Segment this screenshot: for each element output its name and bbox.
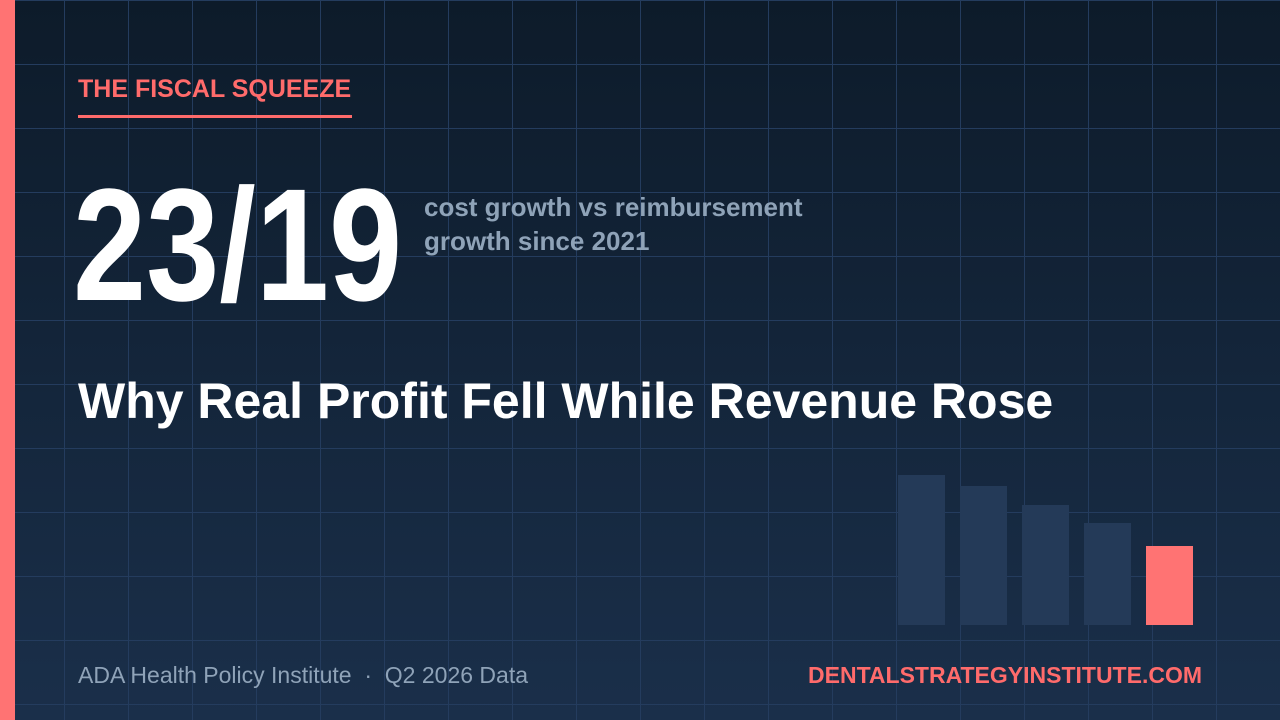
- stat description: cost growth vs reimbursement: [424, 192, 803, 222]
- bar 4: [1084, 523, 1131, 625]
- eyebrow heading: THE FISCAL SQUEEZE: [78, 75, 351, 103]
- source footer: ADA Health Policy Institute · Q2 2026 Data: [78, 662, 528, 688]
- headline: Why Real Profit Fell While Revenue Rose: [78, 373, 1053, 429]
- eyebrow underline: [78, 115, 352, 118]
- bar 1: [898, 475, 945, 625]
- bar 5 highlighted: [1146, 546, 1193, 625]
- accent bar: [0, 0, 15, 720]
- bar 3: [1022, 505, 1069, 625]
- stat description: [424, 192, 803, 256]
- bar chart: [898, 475, 1193, 625]
- big stat: 23/19: [73, 155, 402, 334]
- stat description: growth since 2021: [424, 226, 649, 256]
- bar 2: [960, 486, 1007, 625]
- website footer: DENTALSTRATEGYINSTITUTE.COM: [808, 662, 1202, 688]
